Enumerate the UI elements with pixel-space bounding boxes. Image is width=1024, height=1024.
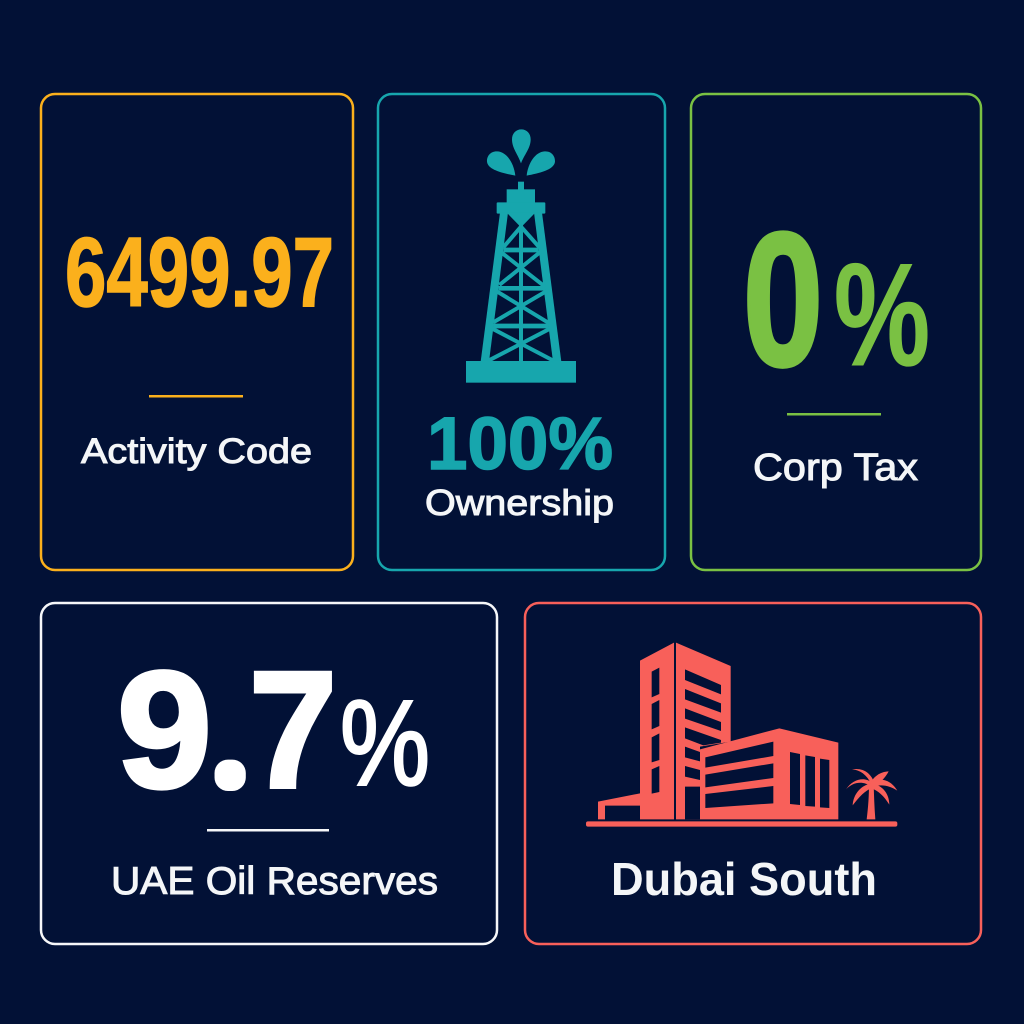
- label: activity code: Activity Code: [81, 432, 312, 471]
- value: 9.7%: .: [226, 752, 234, 784]
- panel: UAE oil reserves: [41, 603, 497, 944]
- value: 9.7%: 9: [117, 638, 212, 823]
- label: Dubai South: Dubai South: [611, 853, 877, 905]
- value: 9.7%: [117, 638, 430, 823]
- icon: buildings with palm tree: [586, 643, 897, 827]
- label: corp tax: Corp Tax: [753, 447, 918, 489]
- value: 0%: 0: [743, 194, 823, 406]
- value: 100%: 100%: [427, 402, 613, 485]
- label: UAE oil reserves: UAE Oil Reserves: [111, 860, 438, 903]
- panel: ownership: [378, 94, 665, 570]
- value: 9.7%: %: [340, 675, 430, 811]
- icon: palm tree: [846, 769, 897, 819]
- value: 6499.97: 6499.97: [65, 217, 334, 327]
- icon: oil derrick: [466, 129, 576, 383]
- panel: Dubai South: [525, 603, 981, 944]
- label: ownership: Ownership: [425, 482, 614, 523]
- value: 0%: [743, 194, 930, 406]
- value: 0%: %: [834, 233, 930, 396]
- panel: corp tax: [691, 94, 981, 570]
- value: 9.7%: 7: [249, 638, 337, 823]
- panel: activity code: [41, 94, 353, 570]
